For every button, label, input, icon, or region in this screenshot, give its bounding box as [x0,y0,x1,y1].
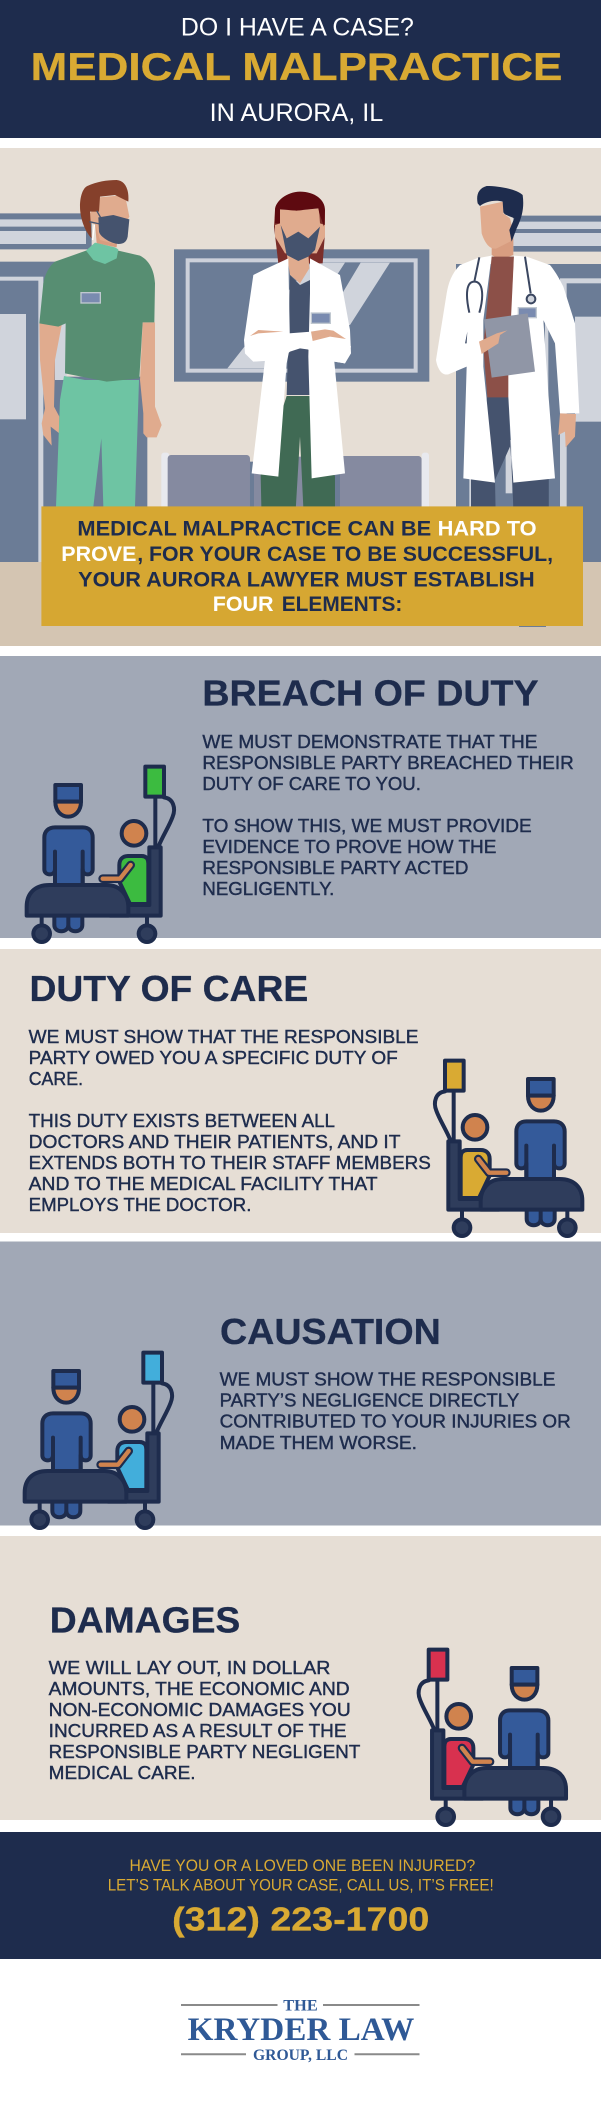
text: duty of care: EXTENDS BOTH TO THEIR STAFF MEMBERS [29,1153,431,1173]
icon: doctor and patient, blue [25,1353,172,1528]
text: duty of care: WE MUST SHOW THAT THE RESPONSIBLE [29,1027,419,1047]
header banner [0,0,601,138]
text: damages: AMOUNTS, THE ECONOMIC AND [49,1679,350,1699]
intro callout box: ELEMENTS: [282,591,402,616]
hospital hallway background, left [0,160,429,562]
logo: the Kryder Law Group: KRYDER LAW [188,2012,414,2048]
call to action text: HAVE YOU OR A LOVED ONE BEEN INJURED? [130,1856,475,1875]
intro callout box: PROVE [61,541,136,566]
person: nurse in green scrubs [39,180,162,507]
header kicker: DO I HAVE A CASE? [181,13,414,41]
panel: duty of care [0,949,601,1233]
location subtitle: IN AURORA, IL [210,99,383,127]
text: breach of duty [202,732,574,899]
intro callout box: MEDICAL MALPRACTICE CAN BE [77,516,431,541]
call to action text: LET’S TALK ABOUT YOUR CASE, CALL US, IT’S FREE! [108,1875,494,1894]
text: breach of duty: NEGLIGENTLY. [202,879,334,899]
intro callout box: FOUR [213,591,274,616]
text: causation [220,1370,571,1453]
text: causation: WE MUST SHOW THE RESPONSIBLE [220,1370,555,1390]
text: causation: CONTRIBUTED TO YOUR INJURIES OR [220,1412,571,1432]
logo: the Kryder Law Group: GROUP, LLC [253,2047,348,2064]
phone number: (312) 223-1700 [172,1901,429,1938]
floor [0,562,601,646]
text: causation: PARTY’S NEGLIGENCE DIRECTLY [220,1391,519,1411]
text: damages: WE WILL LAY OUT, IN DOLLAR [49,1658,330,1678]
text: causation: MADE THEM WORSE. [220,1433,417,1453]
text: duty of care [29,1027,431,1215]
text: breach of duty: DUTY OF CARE TO YOU. [202,774,421,794]
intro callout box: HARD TO [438,516,537,541]
panel: causation [0,1242,601,1526]
logo: the Kryder Law Group [181,1997,420,2064]
text: damages: NON-ECONOMIC DAMAGES YOU [49,1700,351,1720]
heading: duty of care: DUTY OF CARE [30,968,308,1009]
main title: MEDICAL MALPRACTICE [31,46,562,89]
heading: damages: DAMAGES [50,1600,240,1640]
person: male doctor with clipboard and stethoscope [436,186,579,513]
text: breach of duty: EVIDENCE TO PROVE HOW THE [202,837,496,857]
text: duty of care: CARE. [29,1069,83,1089]
text: duty of care: EMPLOYS THE DOCTOR. [29,1195,251,1215]
hospital hallway background, right [456,216,601,562]
text: damages: RESPONSIBLE PARTY NEGLIGENT [49,1742,360,1762]
icon: doctor and patient, gold [435,1061,582,1236]
text: duty of care: AND TO THE MEDICAL FACILITY THAT [29,1174,377,1194]
text: damages [49,1658,360,1783]
icon: doctor and patient, red [419,1650,566,1825]
call to action text [108,1856,494,1894]
call to action banner [0,1832,601,1959]
intro callout box [41,506,583,626]
logo: the Kryder Law Group: THE [283,1997,318,2014]
panel: breach of duty [0,656,601,938]
text: duty of care: PARTY OWED YOU A SPECIFIC DUTY OF [29,1048,398,1068]
person: female doctor with crossed arms [244,192,351,522]
text: duty of care: DOCTORS AND THEIR PATIENTS, AND IT [29,1132,401,1152]
text: breach of duty: RESPONSIBLE PARTY ACTED [202,858,468,878]
text: breach of duty: WE MUST DEMONSTRATE THAT THE [202,732,537,752]
text: duty of care: THIS DUTY EXISTS BETWEEN ALL [29,1111,335,1131]
text: breach of duty: RESPONSIBLE PARTY BREACHED THEIR [202,753,574,773]
hero illustration panel [0,148,601,646]
text: breach of duty: TO SHOW THIS, WE MUST PROVIDE [202,816,532,836]
heading: breach of duty: BREACH OF DUTY [202,673,539,714]
text: damages: MEDICAL CARE. [49,1763,196,1783]
text: damages: INCURRED AS A RESULT OF THE [49,1721,346,1741]
panel: damages [0,1536,601,1820]
icon: doctor and patient, green [27,767,174,942]
heading: causation: CAUSATION [220,1311,441,1352]
intro callout box: , FOR YOUR CASE TO BE SUCCESSFUL, [137,541,553,566]
intro callout box: YOUR AURORA LAWYER MUST ESTABLISH [78,566,535,591]
